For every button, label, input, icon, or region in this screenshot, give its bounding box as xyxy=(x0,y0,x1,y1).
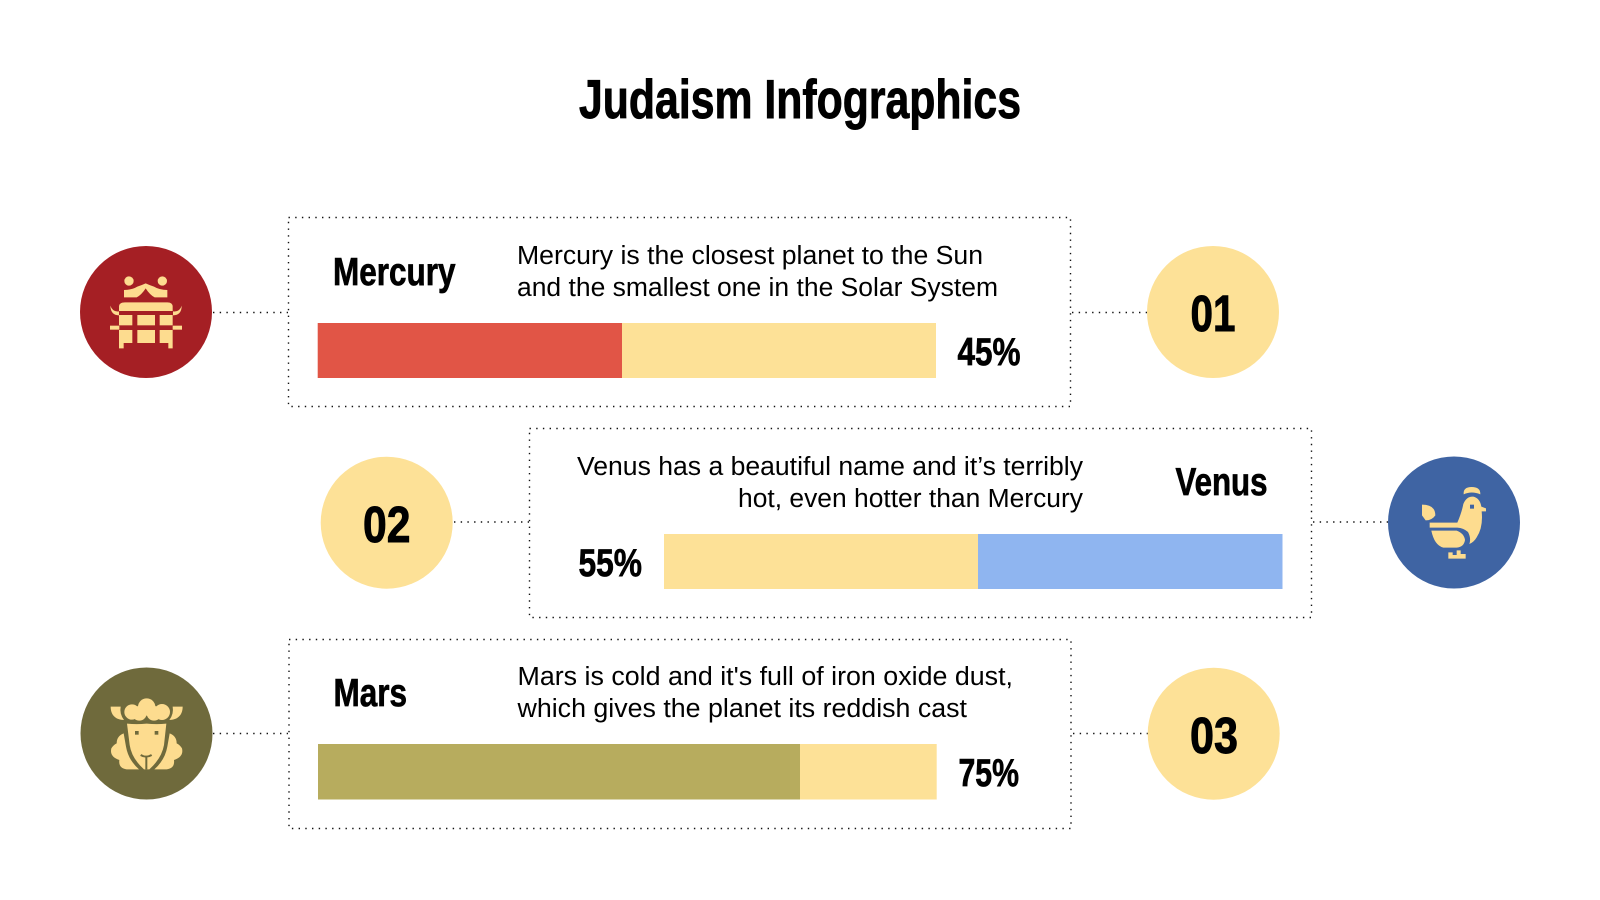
bar chart: Mercury 45% xyxy=(318,323,936,378)
text block: Mars description: which gives the planet its reddish cast xyxy=(516,695,967,723)
heading: Mercury: Mercury xyxy=(333,251,456,294)
icon: temple on red circle xyxy=(80,246,212,378)
icon: rooster on blue circle xyxy=(1388,456,1520,588)
heading: Venus: Venus xyxy=(1176,461,1268,504)
panel: Venus xyxy=(530,428,1312,618)
panel: Mercury xyxy=(288,218,1070,406)
heading: Mars: Mars xyxy=(334,672,407,715)
connector: Mercury panel to number xyxy=(1072,312,1147,314)
percentage: 55%: 55% xyxy=(578,542,642,585)
text block: Venus description: hot, even hotter than Mercury xyxy=(738,485,1083,513)
text block: Venus description: Venus has a beautiful name and it’s terribly xyxy=(577,453,1083,481)
number badge: 03: 03 xyxy=(1190,707,1238,764)
connector: Mars panel to number xyxy=(1073,732,1148,734)
number badge: 01: 01 xyxy=(1190,285,1236,342)
text block: Mercury description: and the smallest one in the Solar System xyxy=(517,274,998,302)
percentage: 45%: 45% xyxy=(958,331,1020,374)
number badge: 02: 02 xyxy=(363,496,410,553)
connector: Mercury icon to panel xyxy=(213,312,288,314)
icon: sheep on olive circle xyxy=(80,668,212,800)
text block: Mars description xyxy=(516,663,1013,723)
text block: Mercury description xyxy=(517,242,998,302)
text block: Mars description: Mars is cold and it's full of iron oxide dust, xyxy=(518,663,1013,691)
text block: Venus description xyxy=(577,453,1083,513)
number badge: 03 xyxy=(1148,668,1280,800)
percentage: 75%: 75% xyxy=(958,752,1019,795)
bar chart: Mars 75% xyxy=(318,744,937,800)
connector: number 02 to Venus panel xyxy=(454,521,529,523)
number badge: 02 xyxy=(321,457,453,589)
bar chart: Venus 55% xyxy=(664,534,1282,589)
number badge: 01 xyxy=(1147,246,1279,378)
title: Judaism Infographics xyxy=(579,68,1021,130)
connector: Mars icon to panel xyxy=(213,732,288,734)
text block: Mercury description: Mercury is the closest planet to the Sun xyxy=(517,242,983,270)
panel: Mars xyxy=(289,640,1071,828)
connector: Venus panel to icon xyxy=(1313,521,1388,523)
